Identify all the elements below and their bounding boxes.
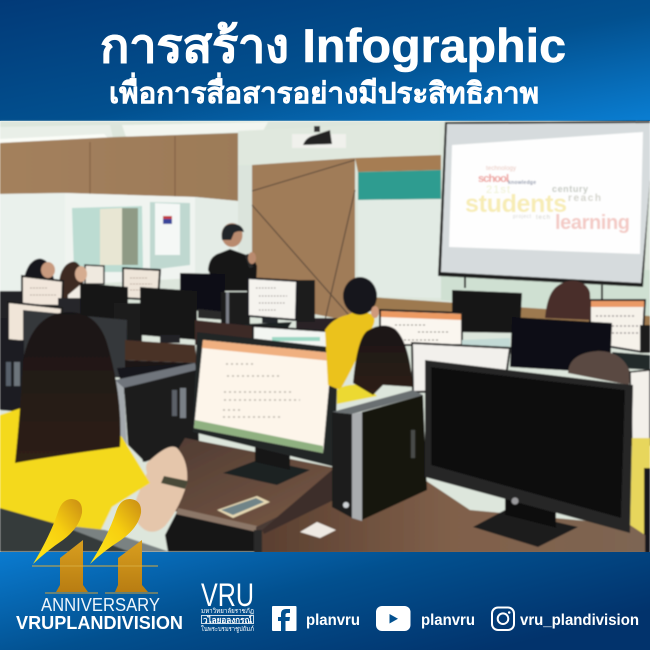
projector — [292, 126, 346, 148]
smartphone — [217, 496, 270, 518]
back row monitors left — [85, 265, 160, 300]
woman in yellow shirt front left — [0, 312, 188, 532]
word cloud: reach — [568, 193, 601, 204]
logo: VRU: ในพระบรมราชูปถัมภ์ — [201, 625, 254, 633]
room background — [0, 121, 650, 553]
presenter — [208, 223, 257, 291]
logo: VRU — [201, 577, 254, 633]
desk front right — [262, 470, 645, 553]
word cloud: technology — [486, 166, 516, 172]
label: instagram: vru_plandivision — [520, 612, 639, 629]
icon: facebook — [272, 606, 296, 631]
projector screen — [438, 121, 650, 299]
middle monitor — [412, 343, 510, 392]
word cloud — [465, 166, 630, 234]
right back area: monitors and attendees — [380, 281, 650, 373]
icon: instagram — [492, 608, 514, 630]
photo: classroom training session — [0, 121, 650, 553]
word cloud: 21st — [486, 184, 510, 196]
title: การสร้าง Infographic — [100, 19, 566, 72]
word cloud: students — [465, 190, 567, 218]
front monitor bottom left — [0, 508, 170, 552]
woman attendee long dark hair — [337, 325, 413, 404]
subtitle: เพื่อการสื่อสารอย่างมีประสิทธิภาพ — [109, 72, 539, 110]
tower front right — [332, 390, 427, 521]
wall-side mid monitors — [253, 326, 340, 358]
footer band — [0, 552, 650, 650]
logo: VRU: วไลยอลงกรณ์ — [203, 615, 252, 625]
second row computers left — [0, 302, 252, 462]
word cloud: learning — [555, 212, 630, 234]
attendee in yellow polo — [325, 277, 379, 390]
black tower, centre left — [115, 363, 199, 462]
word cloud: tech — [536, 215, 550, 221]
word cloud: school — [478, 173, 509, 185]
header band — [0, 0, 650, 121]
attendees at back left — [22, 259, 87, 300]
word cloud: project — [513, 214, 532, 220]
back row computers — [0, 273, 315, 345]
logo: 44 anniversary: ANNIVERSARY — [41, 595, 160, 615]
icon: youtube — [376, 606, 410, 631]
logo: VRU: VRU — [201, 577, 254, 613]
bald attendee and right monitor — [568, 351, 650, 553]
word cloud: knowledge — [508, 180, 536, 186]
label: youtube: planvru — [421, 612, 475, 629]
logo: VRU: มหาวิทยาลัยราชภัฏ — [201, 607, 254, 615]
big black monitor front right — [425, 360, 633, 547]
word cloud: century — [552, 184, 588, 194]
logo: 44 anniversary: VRUPLANDIVISION — [16, 613, 183, 633]
label: facebook: planvru — [306, 612, 360, 629]
main monitor front left — [193, 332, 338, 485]
desk front left — [150, 438, 336, 553]
logo: 44 anniversary — [16, 499, 183, 633]
